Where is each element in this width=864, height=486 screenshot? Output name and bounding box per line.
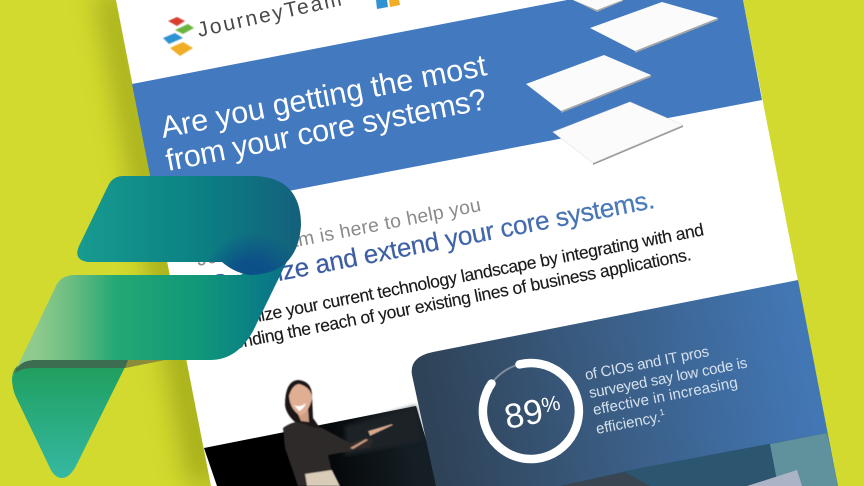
presenter photo xyxy=(283,380,393,486)
face xyxy=(289,384,312,416)
stat description: of CIOs and IT pros xyxy=(584,343,710,384)
panel: statistic xyxy=(412,280,838,486)
stat photo xyxy=(560,433,838,486)
icon: Microsoft logo xyxy=(376,0,400,9)
intro line: JourneyTeam is here to help you xyxy=(195,194,483,271)
logo top bar xyxy=(77,176,301,275)
icon: JourneyTeam logo xyxy=(163,17,194,56)
body text: Modernize your current technology landscape by integrating with and xyxy=(203,219,705,336)
body text: extending the reach of your existing lines of business applications. xyxy=(210,244,693,357)
logo ribbon xyxy=(12,253,291,378)
stat description: effective in increasing xyxy=(592,374,739,419)
stat value: % xyxy=(540,392,562,418)
logo tail xyxy=(12,361,128,478)
neck xyxy=(297,408,309,422)
stat description xyxy=(584,343,749,438)
title: from your core systems? xyxy=(163,82,489,178)
photo backdrop xyxy=(204,406,440,486)
body xyxy=(283,421,373,486)
fold shadow xyxy=(13,360,162,375)
hair xyxy=(285,380,320,428)
forearm xyxy=(350,439,368,449)
stat description: efficiency. xyxy=(595,409,662,438)
subheading: Optimize and extend your core systems. xyxy=(207,184,657,300)
floating tiles xyxy=(526,0,718,165)
header band xyxy=(132,0,762,216)
skirt xyxy=(305,470,340,486)
page shadow xyxy=(96,0,222,486)
donut chart: 89% xyxy=(483,363,579,459)
title: Are you getting the most xyxy=(158,48,490,145)
smile xyxy=(294,403,306,411)
hand xyxy=(368,424,393,436)
stat description: surveyed say low code is xyxy=(588,355,749,402)
stat description: 1 xyxy=(658,407,665,418)
stat value: 89 xyxy=(501,392,546,437)
icon: Power Pages logo xyxy=(12,176,301,478)
